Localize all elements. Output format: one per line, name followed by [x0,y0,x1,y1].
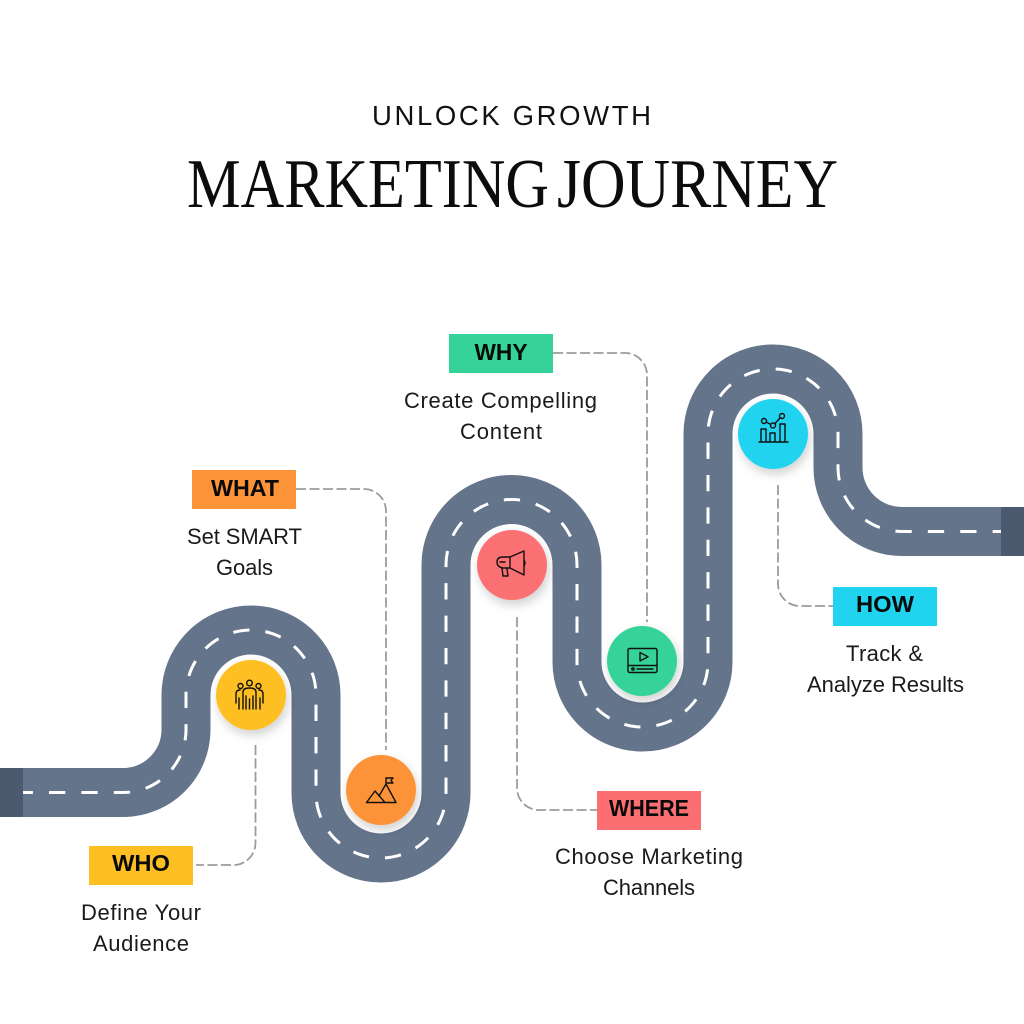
icon: audience group [236,680,263,709]
node: where [477,530,547,600]
title: MARKETING [187,146,549,223]
connector: what [296,489,386,750]
connector: where [517,617,597,810]
connector: who [196,745,256,865]
text: create compelling content [404,388,597,444]
text: choose marketing channels: Channels [603,875,695,900]
subtitle: UNLOCK GROWTH [372,100,651,131]
label: who [89,846,193,885]
label: where: WHERE [609,795,689,821]
label: what [192,470,296,509]
text: set smart goals: Goals [216,555,273,580]
label: why [449,334,553,373]
label: how: HOW [856,591,914,617]
node: why [607,626,677,696]
text: set smart goals: Set SMART [187,524,302,549]
title: JOURNEY [557,146,838,223]
label: why: WHY [474,339,528,365]
text: create compelling content: Create Compelling [404,388,597,413]
winding road [0,369,1024,858]
text: track and analyze results [807,641,964,697]
connector: why [553,353,647,622]
text: set smart goals [187,524,302,580]
text: create compelling content: Content [460,419,542,444]
node: who [216,660,286,730]
icon: mountain flag [366,778,396,802]
label: what: WHAT [211,475,279,501]
icon: video player [628,648,657,672]
icon: growth chart [759,414,788,442]
node: how [738,399,808,469]
text: track and analyze results: Analyze Results [807,672,964,697]
text: choose marketing channels: Choose Marketing [555,844,743,869]
text: define your audience: Define Your [81,900,201,925]
title [187,146,838,223]
label: how [833,587,937,626]
label: where [597,791,701,830]
connector: how [778,485,833,606]
icon: megaphone [497,551,525,576]
text: define your audience: Audience [93,931,189,956]
text: track and analyze results: Track & [846,641,923,666]
text: define your audience [81,900,201,956]
node: what [346,755,416,825]
label: who: WHO [112,850,170,876]
text: choose marketing channels [555,844,743,900]
